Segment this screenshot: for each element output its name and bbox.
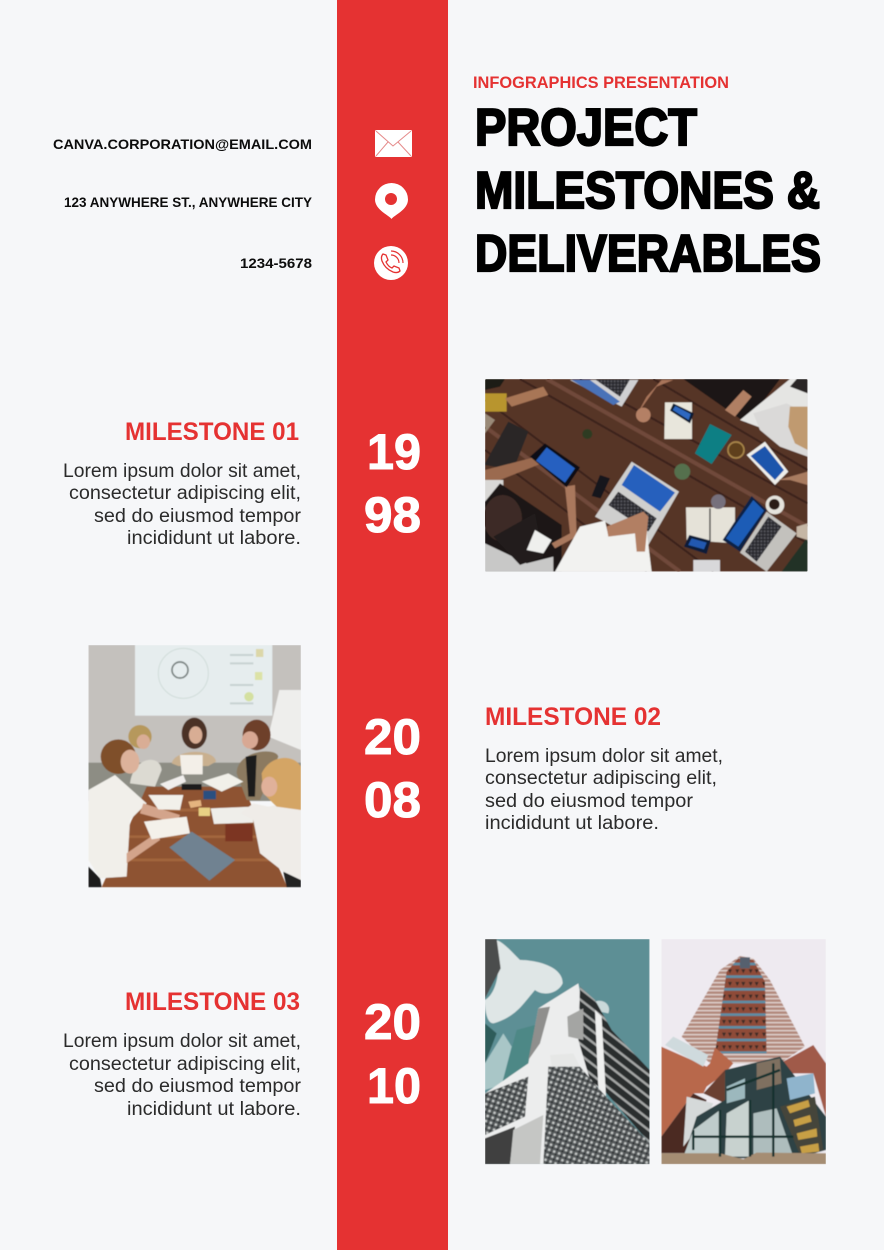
milestone 03 text: MILESTONE 03: [125, 988, 300, 1016]
year 2008: 20: [364, 709, 421, 765]
milestone 01 text: consectetur adipiscing elit,: [69, 483, 301, 504]
title: [475, 99, 821, 283]
milestone 03 text: [63, 988, 302, 1120]
milestone 02 text: sed do eiusmod tempor: [485, 791, 694, 812]
milestone 02 text: [485, 703, 723, 834]
milestone 02 text: Lorem ipsum dolor sit amet,: [485, 746, 723, 767]
year 2010: [364, 994, 421, 1114]
year 2008: 08: [364, 772, 421, 828]
milestone 01 text: sed do eiusmod tempor: [94, 506, 302, 527]
contact details: [53, 136, 313, 271]
milestone 01 text: [63, 418, 302, 549]
year 1998: 19: [367, 424, 421, 480]
icon: phone: [374, 246, 408, 280]
title: DELIVERABLES: [475, 225, 821, 283]
milestone 02 text: MILESTONE 02: [485, 703, 661, 731]
contact details: CANVA.CORPORATION@EMAIL.COM: [53, 136, 312, 152]
milestone 01 text: Lorem ipsum dolor sit amet,: [63, 461, 301, 482]
red timeline band: [337, 0, 448, 1250]
milestone 02 text: incididunt ut labore.: [485, 813, 659, 834]
year 2010: 10: [367, 1058, 421, 1114]
photo: overhead team meeting with laptops: [483, 379, 808, 572]
photo: white high-rise against teal sky: [485, 939, 650, 1164]
milestone 01 text: incididunt ut labore.: [127, 528, 301, 549]
contact details: 123 ANYWHERE ST., ANYWHERE CITY: [64, 194, 313, 210]
year 2008: [364, 709, 421, 828]
icon: location pin: [375, 183, 408, 219]
year 1998: [364, 424, 421, 543]
title: PROJECT: [475, 99, 697, 157]
photo: team meeting around a table with projection: [88, 645, 301, 887]
milestone 03 text: Lorem ipsum dolor sit amet,: [63, 1031, 301, 1052]
milestone 01 text: MILESTONE 01: [125, 418, 299, 446]
year 1998: 98: [364, 487, 421, 543]
milestone 03 text: incididunt ut labore.: [127, 1099, 301, 1120]
milestone 03 text: consectetur adipiscing elit,: [69, 1054, 301, 1075]
title: MILESTONES &: [475, 162, 820, 220]
milestone 02 text: consectetur adipiscing elit,: [485, 768, 717, 789]
year 2010: 20: [364, 994, 421, 1050]
eyebrow heading: INFOGRAPHICS PRESENTATION: [473, 73, 729, 92]
photo: red brick tower with glass atrium: [661, 939, 826, 1164]
icon: envelope: [375, 130, 412, 157]
contact details: 1234-5678: [240, 255, 312, 271]
milestone 03 text: sed do eiusmod tempor: [94, 1076, 302, 1097]
